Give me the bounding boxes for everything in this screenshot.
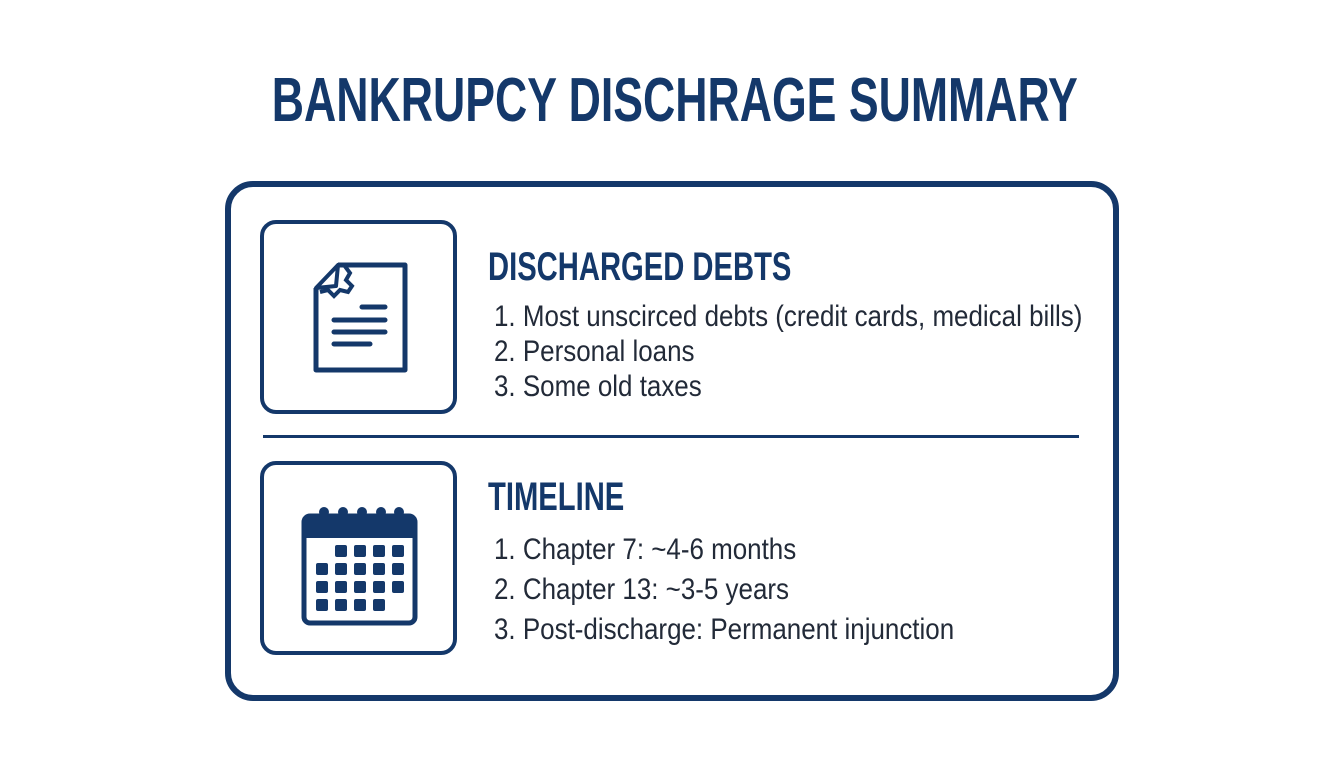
list: debts: 2. Personal loans <box>494 335 695 368</box>
list: debts: 1. Most unscirced debts (credit cards, medical bills) <box>494 300 1082 333</box>
icon: torn document <box>314 262 408 372</box>
list: timeline <box>494 533 954 646</box>
heading: discharged debts: DISCHARGED DEBTS <box>488 245 791 289</box>
heading: timeline: TIMELINE <box>488 475 624 519</box>
divider <box>263 435 1079 438</box>
list: debts <box>494 300 1082 403</box>
list: debts: 3. Some old taxes <box>494 370 702 403</box>
list: timeline: 2. Chapter 13: ~3-5 years <box>494 573 789 606</box>
icon box: calendar <box>260 461 457 655</box>
list: timeline: 3. Post-discharge: Permanent injunction <box>494 613 954 646</box>
title: BANKRUPCY DISCHRAGE SUMMARY <box>272 66 1078 135</box>
text block: timeline <box>488 475 954 646</box>
list: timeline: 1. Chapter 7: ~4-6 months <box>494 533 796 566</box>
panel: main frame <box>225 181 1119 701</box>
icon box: document <box>260 220 457 414</box>
text block: discharged debts <box>488 245 1082 403</box>
icon: calendar <box>302 507 418 626</box>
